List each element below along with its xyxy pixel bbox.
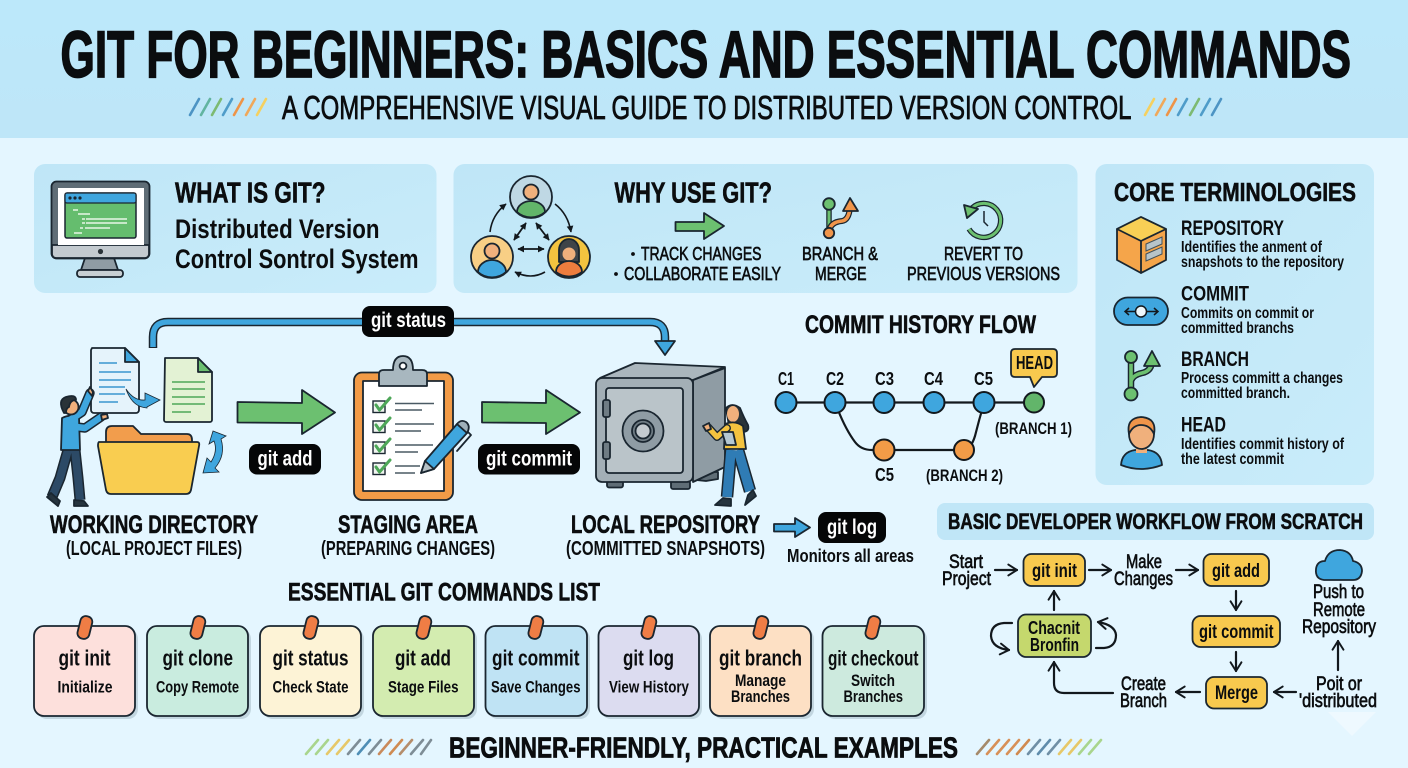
command: git log: [787, 512, 914, 566]
chart: commit history flow: [776, 311, 1072, 485]
workflow nodes: [1018, 554, 1280, 708]
command: git add: [249, 444, 321, 474]
icon: pen: [421, 421, 471, 473]
command cards: [34, 615, 927, 719]
card: git status: git status: [272, 646, 348, 670]
card: git checkout: git checkout: [828, 646, 918, 670]
panel: core terminologies: [1096, 164, 1374, 485]
figure: woman with tablet: [703, 405, 756, 506]
term: commit: Commits on commit or: [1181, 305, 1314, 322]
workflow labels: Poit or: [1316, 674, 1363, 695]
card: git add: [373, 615, 477, 719]
arrow: staging to local repository: [482, 390, 580, 434]
commit: branch 1 tip: [1024, 392, 1044, 412]
stage: local repository: [566, 363, 765, 560]
commit labels: C2: [826, 369, 844, 389]
commit labels: (BRANCH 1): [995, 419, 1072, 438]
commits on main branch: [776, 392, 994, 413]
label: revert to previous versions: REVERT TO: [944, 243, 1023, 264]
heading band: workflow: [937, 503, 1374, 540]
workflow labels: Changes: [1114, 569, 1173, 590]
heading: core terminologies: CORE TERMINOLOGIES: [1114, 177, 1356, 207]
label: branch and merge: [802, 243, 879, 284]
card: git commit: git commit: [492, 646, 580, 670]
term: head: HEAD: [1181, 414, 1226, 436]
icon: branch and merge: [823, 198, 858, 238]
label: working directory: [50, 511, 258, 560]
label: git status: git status: [371, 309, 446, 332]
benefit: track and collaborate: TRACK CHANGES: [641, 243, 762, 264]
term: branch: BRANCH: [1181, 348, 1249, 371]
workflow labels: Remote: [1313, 600, 1365, 621]
card: git branch: [710, 615, 814, 719]
workflow nodes: git init: [1032, 561, 1078, 582]
label: working directory: (LOCAL PROJECT FILES): [66, 538, 242, 560]
term: repository: [1117, 217, 1344, 273]
arrow: git status bypass: [153, 306, 675, 355]
command: git commit: git commit: [486, 448, 572, 470]
commit labels: C5: [974, 369, 993, 389]
card: git clone: [147, 615, 251, 719]
card: git init: git init: [58, 646, 111, 670]
term: commit: [1114, 282, 1314, 337]
label: staging area: [321, 511, 495, 560]
label: branch and merge: MERGE: [815, 263, 866, 284]
callout: HEAD: [1011, 349, 1057, 387]
arrow: two-way sync: [203, 431, 226, 473]
label: git status: [362, 306, 454, 337]
commit labels: (BRANCH 2): [926, 466, 1003, 485]
workflow labels: Create: [1121, 674, 1166, 695]
label: revert to previous versions: [907, 243, 1060, 284]
card: git log: git log: [623, 646, 674, 670]
commit labels: [778, 369, 1072, 485]
label: local repository: [566, 511, 765, 560]
term: head: Identifies commit history of: [1181, 436, 1345, 453]
panel: what is git: [34, 164, 436, 293]
command: git commit: [478, 444, 580, 474]
heading: what is git: WHAT IS GIT?: [175, 178, 326, 210]
commit labels: C3: [875, 369, 894, 389]
workflow nodes: Bronfin: [1030, 635, 1079, 655]
icon: document blue: [91, 348, 139, 413]
term: repository: snapshots to the repository: [1181, 254, 1344, 271]
workflow nodes: git add: [1212, 561, 1260, 582]
icon: cloud: [1316, 550, 1362, 580]
label: local repository: LOCAL REPOSITORY: [571, 511, 760, 539]
icon: safe: [596, 363, 725, 489]
arrow: copy between documents: [126, 389, 160, 408]
workflow labels: Repository: [1302, 617, 1376, 638]
benefit: track and collaborate: [614, 243, 781, 284]
card: git commit: [486, 615, 590, 719]
stage: staging area: [321, 356, 495, 560]
note: monitors all areas: Monitors all areas: [787, 546, 914, 566]
command: git log: git log: [827, 516, 877, 539]
card: git clone: git clone: [162, 646, 233, 670]
commit labels: C5: [875, 465, 894, 485]
panel: why use git: [454, 164, 1078, 293]
commit labels: C1: [778, 369, 794, 389]
card: git add: Stage Files: [388, 678, 458, 696]
icon: folder: [98, 426, 199, 494]
workflow: basic developer workflow from scratch: [937, 503, 1377, 736]
card: git init: [34, 615, 138, 719]
workflow labels: Branch: [1120, 691, 1167, 712]
card: git log: View History: [609, 678, 689, 696]
term: head: [1121, 414, 1345, 469]
workflow nodes: git commit: [1199, 622, 1274, 643]
card: git checkout: Switch: [851, 671, 895, 690]
heading: essential git commands list: ESSENTIAL GIT COMMANDS LIST: [288, 578, 600, 606]
workflow nodes: Chacnit: [1028, 618, 1080, 638]
command: git add: git add: [258, 448, 312, 470]
commit labels: C4: [924, 369, 943, 389]
card: git branch: Branches: [731, 687, 790, 706]
label: staging area: (PREPARING CHANGES): [321, 538, 495, 560]
card: git branch: Manage: [735, 671, 786, 690]
callout: HEAD: HEAD: [1016, 353, 1053, 373]
card: git checkout: Branches: [844, 687, 903, 706]
stage: working directory: [47, 348, 258, 560]
term: repository: REPOSITORY: [1181, 217, 1284, 240]
description: what is git: Distributed Version: [175, 214, 380, 244]
term: commit: committed branchs: [1181, 320, 1294, 337]
card: git init: Initialize: [58, 678, 112, 696]
header banner: [0, 0, 1408, 138]
term: head: the latest commit: [1181, 451, 1284, 468]
workflow labels: 'distributed: [1299, 691, 1377, 712]
card: git branch: git branch: [719, 646, 802, 670]
label: working directory: WORKING DIRECTORY: [50, 511, 258, 539]
workflow arrows: [991, 570, 1338, 693]
workflow labels: [942, 552, 1377, 712]
workflow labels: Start: [949, 552, 984, 573]
arrow: working directory to staging: [238, 390, 335, 434]
description: what is git: Control Sontrol System: [175, 244, 418, 274]
label: staging area: STAGING AREA: [338, 511, 478, 539]
term: repository: Identifies the anment of: [1181, 239, 1323, 256]
term: commit: COMMIT: [1181, 282, 1249, 306]
card: git log: [598, 615, 702, 719]
workflow labels: Push to: [1313, 582, 1364, 603]
icon: green arrow: [676, 213, 724, 239]
icon: computer monitor: [52, 182, 150, 277]
card: git add: git add: [395, 646, 451, 670]
faint sparkle mark: [1328, 712, 1376, 736]
icon: document green: [164, 358, 212, 422]
workflow nodes: Merge: [1215, 683, 1258, 704]
figure: man holding documents: [47, 387, 108, 506]
footer line: BEGINNER-FRIENDLY, PRACTICAL EXAMPLES: [449, 732, 958, 764]
benefit: track and collaborate: COLLABORATE EASILY: [624, 263, 781, 284]
card: git status: Check State: [272, 678, 348, 696]
icon: collaborating people: [471, 176, 590, 278]
card: git commit: Save Changes: [491, 678, 580, 696]
workflow labels: Project: [942, 569, 992, 590]
commits on branch 2: [874, 440, 974, 460]
term: branch: Process committ a changes: [1181, 370, 1343, 387]
label: revert to previous versions: PREVIOUS VERSIONS: [907, 263, 1060, 284]
card: git checkout: [822, 615, 927, 719]
heading: why use git: WHY USE GIT?: [614, 178, 772, 210]
card: git status: [260, 615, 364, 719]
workflow labels: Make: [1126, 552, 1162, 573]
icon: clipboard with checklist: [354, 356, 471, 500]
term: branch: committed branch.: [1181, 385, 1290, 402]
label: local repository: (COMMITTED SNAPSHOTS): [566, 538, 765, 560]
term: branch: [1124, 348, 1343, 402]
arrow: repository to git log: [774, 518, 810, 537]
heading: commit history flow: COMMIT HISTORY FLOW: [805, 311, 1036, 339]
description: what is git: [175, 214, 418, 274]
card: git clone: Copy Remote: [156, 678, 239, 696]
label: branch and merge: BRANCH &: [802, 243, 879, 264]
icon: revert clock: [964, 203, 1001, 237]
